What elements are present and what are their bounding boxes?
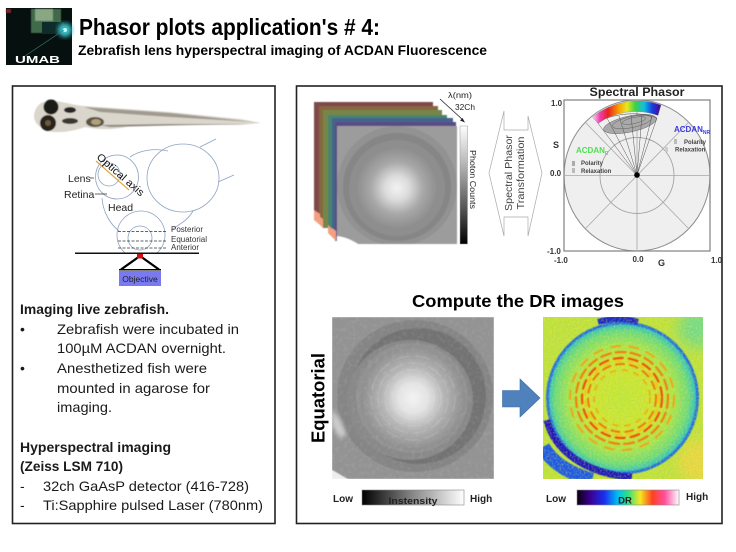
text block: hyperspectral imaging: (Zeiss LSM 710) bbox=[20, 458, 123, 474]
label: polarity relaxation left: Polarity bbox=[581, 161, 604, 167]
label: ACDAN R: R bbox=[605, 151, 609, 157]
arrow: spectral phasor transformation: Spectral Phasor bbox=[503, 135, 515, 211]
axis labels bbox=[547, 99, 723, 268]
text block: imaging live zebrafish: • bbox=[20, 360, 25, 376]
text block: hyperspectral imaging: Hyperspectral imaging bbox=[20, 439, 171, 455]
rainbow spectrum arc bbox=[592, 101, 661, 124]
focal planes bbox=[118, 232, 166, 248]
text block: imaging live zebrafish: Zebrafish were incubated in bbox=[57, 321, 239, 337]
logo: UMAB bbox=[6, 8, 72, 66]
title: Phasor plots application's # 4: bbox=[79, 14, 380, 40]
axis labels: -1.0 bbox=[554, 256, 568, 265]
label: retina: Retina bbox=[64, 189, 95, 201]
image: zebrafish larva bbox=[34, 100, 261, 132]
coverslip line bbox=[75, 252, 199, 254]
image: intensity bbox=[332, 317, 494, 479]
label: head: Head bbox=[108, 202, 133, 214]
label: anterior: Anterior bbox=[171, 243, 199, 252]
label: lens: Lens bbox=[68, 173, 91, 185]
orange fibre rings bbox=[570, 346, 674, 450]
label: posterior: Posterior bbox=[171, 225, 203, 234]
label: polarity relaxation right bbox=[665, 139, 707, 154]
text block: imaging live zebrafish bbox=[20, 301, 239, 415]
arrow: intensity to DR bbox=[502, 379, 540, 417]
axis labels: 0.0 bbox=[632, 255, 644, 264]
text block: imaging live zebrafish: Imaging live zebrafish. bbox=[20, 301, 169, 317]
label: photon counts: Photon Counts bbox=[468, 150, 477, 209]
color bar: intensity bbox=[362, 490, 464, 507]
heading: compute the DR images: Compute the DR images bbox=[412, 291, 624, 311]
text block: hyperspectral imaging: - bbox=[20, 478, 25, 494]
subtitle: Zebrafish lens hyperspectral imaging of ACDAN Fluorescence bbox=[78, 42, 487, 58]
text block: hyperspectral imaging: Ti:Sapphire pulsed Laser (780nm) bbox=[43, 497, 263, 513]
label: ACDAN NR: NR bbox=[703, 130, 711, 136]
objective lens bbox=[119, 254, 161, 286]
arrow: wavelength axis bbox=[440, 99, 465, 122]
chart title: Spectral Phasor bbox=[590, 85, 685, 99]
label: high: High bbox=[686, 492, 708, 503]
image stack: 32 channels bbox=[314, 102, 457, 246]
label: equatorial: Equatorial bbox=[308, 353, 328, 443]
text block: imaging live zebrafish: imaging. bbox=[57, 399, 112, 415]
origin point bbox=[634, 172, 640, 178]
objective lens: Objective bbox=[122, 274, 158, 284]
axis labels: 1.0 bbox=[711, 256, 723, 265]
color bar: intensity: Instensity bbox=[388, 496, 438, 507]
label: wavelength: λ(nm) bbox=[448, 91, 472, 100]
panel: imaging setup bbox=[12, 86, 275, 524]
axis labels: 0.0 bbox=[550, 169, 562, 178]
axis labels: -1.0 bbox=[547, 247, 561, 256]
label: optical axis: Optical axis bbox=[94, 151, 146, 199]
universal circle bbox=[564, 100, 710, 251]
color bar: photon counts bbox=[460, 126, 468, 244]
label: equatorial: Equatorial bbox=[171, 235, 207, 244]
text block: hyperspectral imaging: 32ch GaAsP detector (416-728) bbox=[43, 478, 249, 494]
axis labels: 1.0 bbox=[551, 99, 563, 108]
label: low: Low bbox=[333, 494, 353, 505]
text block: hyperspectral imaging: - bbox=[20, 497, 25, 513]
label: polarity relaxation left: Relaxation bbox=[581, 169, 612, 175]
logo: UMAB: UMAB bbox=[15, 54, 61, 66]
phasor cluster bbox=[602, 111, 658, 137]
label: polarity relaxation right: Relaxation bbox=[675, 148, 706, 154]
image: DR map bbox=[543, 317, 703, 479]
label: high: High bbox=[470, 494, 492, 505]
panel: spectral phasor and DR images bbox=[296, 85, 723, 524]
diagram: fish head and optical axis bbox=[96, 139, 234, 259]
arrow: spectral phasor transformation: Transformation bbox=[515, 136, 527, 210]
text block: imaging live zebrafish: Anesthetized fish were bbox=[57, 360, 207, 376]
text block: imaging live zebrafish: 100µM ACDAN overnight. bbox=[57, 340, 226, 356]
arrow: spectral phasor transformation bbox=[489, 111, 542, 236]
label: 32 channels: 32Ch bbox=[455, 103, 475, 112]
chart: spectral phasor bbox=[547, 85, 723, 268]
text block: hyperspectral imaging bbox=[20, 439, 263, 513]
optical axis line bbox=[96, 161, 129, 190]
label: ACDAN R: ACDAN bbox=[576, 146, 605, 155]
axis labels: G bbox=[658, 258, 665, 268]
label: ACDAN NR: ACDAN bbox=[674, 125, 703, 134]
color bar: DR bbox=[577, 490, 679, 506]
text block: imaging live zebrafish: mounted in agarose for bbox=[57, 380, 210, 396]
label: low: Low bbox=[546, 494, 566, 505]
color bar: DR: DR bbox=[618, 496, 632, 506]
spectral radial lines bbox=[597, 115, 657, 175]
outer blue ring bbox=[543, 319, 698, 480]
text block: imaging live zebrafish: • bbox=[20, 321, 25, 337]
leader lines bbox=[90, 178, 107, 194]
blue speckle near ring bbox=[543, 317, 703, 479]
axis labels: S bbox=[553, 140, 559, 150]
label: polarity relaxation right: Polarity bbox=[684, 140, 707, 146]
label: polarity relaxation left bbox=[572, 161, 612, 175]
